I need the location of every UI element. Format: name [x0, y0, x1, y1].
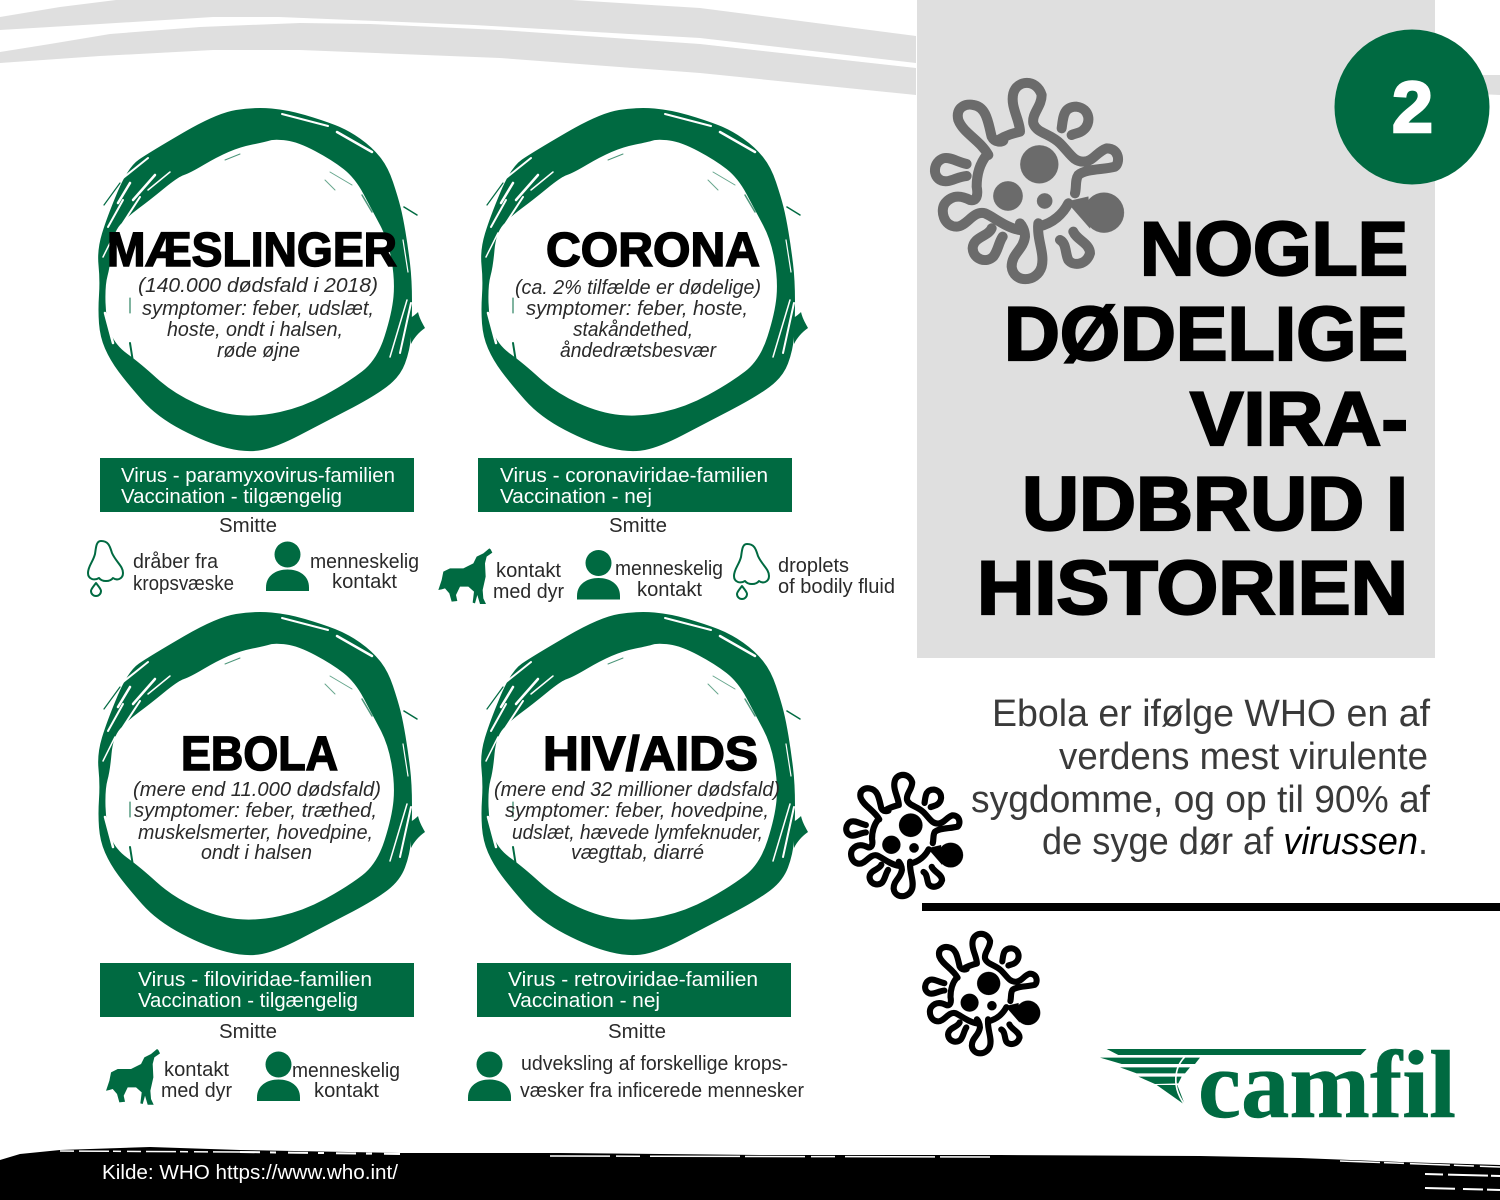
transmission text: menneskelig: [615, 558, 723, 580]
icon: wolf: [106, 1049, 160, 1105]
symptoms text: muskelsmerter, hovedpine,: [138, 822, 373, 844]
panel: corona: [438, 108, 895, 604]
transmission text: med dyr: [161, 1080, 232, 1102]
info box: Virus - retroviridae-familien: [508, 969, 758, 991]
transmission text: menneskelig: [310, 551, 419, 573]
ring: [98, 612, 425, 955]
title: VIRA-: [1190, 377, 1408, 462]
symptoms text: (140.000 dødsfald i 2018): [138, 275, 378, 297]
source text: Kilde: WHO https://www.who.int/: [102, 1162, 398, 1184]
icon: person: [468, 1052, 511, 1101]
title: NOGLE: [1140, 207, 1408, 292]
label: smitte: Smitte: [608, 1021, 666, 1043]
symptoms text: [515, 277, 761, 362]
info box: Vaccination - tilgængelig: [138, 990, 358, 1012]
transmission text: væsker fra inficerede mennesker: [520, 1080, 804, 1102]
symptoms text: [138, 275, 378, 362]
transmission text: kontakt: [314, 1080, 379, 1102]
symptoms text: symptomer: feber, træthed,: [134, 800, 377, 822]
ring: [98, 108, 425, 451]
logo wings: [1100, 1049, 1367, 1107]
transmission text: kontakt: [496, 560, 561, 582]
transmission text: of bodily fluid: [778, 576, 895, 598]
transmission text: [615, 558, 723, 601]
symptoms text: røde øjne: [217, 340, 300, 362]
symptoms text: [494, 779, 780, 864]
heading: MÆSLINGER: [107, 224, 397, 277]
transmission text: droplets: [778, 555, 849, 577]
icon: black virus beside paragraph: [846, 775, 963, 896]
transmission text: [292, 1060, 400, 1102]
symptoms text: [133, 779, 381, 864]
transmission text: med dyr: [493, 581, 564, 603]
text block: ebola fact: de syge dør af virussen.: [1042, 821, 1428, 863]
transmission text: [520, 1053, 804, 1102]
text block: ebola fact: verdens mest virulente: [1059, 736, 1428, 778]
info box: [478, 458, 792, 512]
icon: nose: [734, 544, 769, 599]
transmission text: [778, 555, 895, 598]
info box: Virus - paramyxovirus-familien: [121, 465, 395, 487]
label: smitte: Smitte: [219, 1021, 277, 1043]
icon: person: [266, 542, 309, 591]
icon: person: [577, 550, 620, 600]
transmission text: kontakt: [332, 571, 397, 593]
panel: mæslinger: [88, 108, 425, 596]
symptoms text: ondt i halsen: [201, 842, 312, 864]
info box: [100, 458, 414, 512]
text block: ebola fact: sygdomme, og op til 90% af: [971, 779, 1430, 821]
info box: [477, 963, 791, 1017]
badge: number 2: 2: [1392, 68, 1433, 148]
transmission text: menneskelig: [292, 1060, 400, 1082]
panel: title block: [917, 0, 1435, 658]
heading: HIV/AIDS: [543, 728, 758, 781]
divider line: [922, 903, 1500, 911]
icon: person: [257, 1052, 300, 1101]
badge: number 2: [1334, 30, 1490, 184]
label: smitte: Smitte: [219, 515, 277, 537]
info box: Virus - coronaviridae-familien: [500, 465, 768, 487]
ring: [481, 108, 808, 451]
symptoms text: stakåndethed,: [573, 319, 693, 341]
transmission text: kontakt: [637, 579, 702, 601]
transmission text: [161, 1059, 232, 1102]
icon: grey virus: [935, 83, 1124, 279]
heading: CORONA: [546, 224, 760, 277]
title: UDBRUD I: [1022, 462, 1408, 547]
symptoms text: vægttab, diarré: [571, 842, 704, 864]
panel: hiv/aids: [468, 612, 808, 1102]
symptoms text: åndedrætsbesvær: [560, 340, 717, 362]
symptoms text: symptomer: feber, hovedpine,: [505, 800, 769, 822]
footer: black brush stroke: [0, 1147, 1500, 1200]
transmission text: kontakt: [164, 1059, 229, 1081]
info box: [100, 963, 414, 1017]
icon: nose: [88, 541, 123, 596]
symptoms text: (mere end 32 millioner dødsfald): [494, 779, 780, 801]
info box: Vaccination - nej: [508, 990, 660, 1012]
icon: black virus above logo: [925, 934, 1040, 1053]
text block: ebola fact: Ebola er ifølge WHO en af: [992, 693, 1430, 735]
ring: [481, 612, 808, 955]
symptoms text: hoste, ondt i halsen,: [167, 319, 343, 341]
info box: Vaccination - tilgængelig: [121, 486, 342, 508]
symptoms text: (mere end 11.000 dødsfald): [133, 779, 381, 801]
symptoms text: symptomer: feber, hoste,: [526, 298, 748, 320]
symptoms text: (ca. 2% tilfælde er dødelige): [515, 277, 761, 299]
transmission text: udveksling af forskellige krops-: [521, 1053, 788, 1075]
icon: wolf: [438, 548, 492, 604]
heading: EBOLA: [181, 728, 338, 781]
transmission text: kropsvæske: [133, 573, 234, 595]
transmission text: [133, 551, 234, 595]
title: DØDELIGE: [1004, 292, 1408, 377]
title: HISTORIEN: [977, 546, 1408, 631]
brush strokes: top background: [0, 0, 1500, 95]
symptoms text: symptomer: feber, udslæt,: [142, 298, 374, 320]
info box: Vaccination - nej: [500, 486, 652, 508]
logo: camfil: [1100, 1031, 1456, 1138]
title: [977, 207, 1408, 631]
transmission text: [310, 551, 419, 593]
label: smitte: Smitte: [609, 515, 667, 537]
logo wordmark: camfil: [1198, 1031, 1456, 1138]
panel: ebola: [98, 612, 425, 1105]
transmission text: [493, 560, 564, 603]
symptoms text: udslæt, hævede lymfeknuder,: [512, 822, 763, 844]
info box: Virus - filoviridae-familien: [138, 969, 372, 991]
transmission text: dråber fra: [133, 551, 219, 573]
text block: ebola fact: [971, 693, 1430, 863]
